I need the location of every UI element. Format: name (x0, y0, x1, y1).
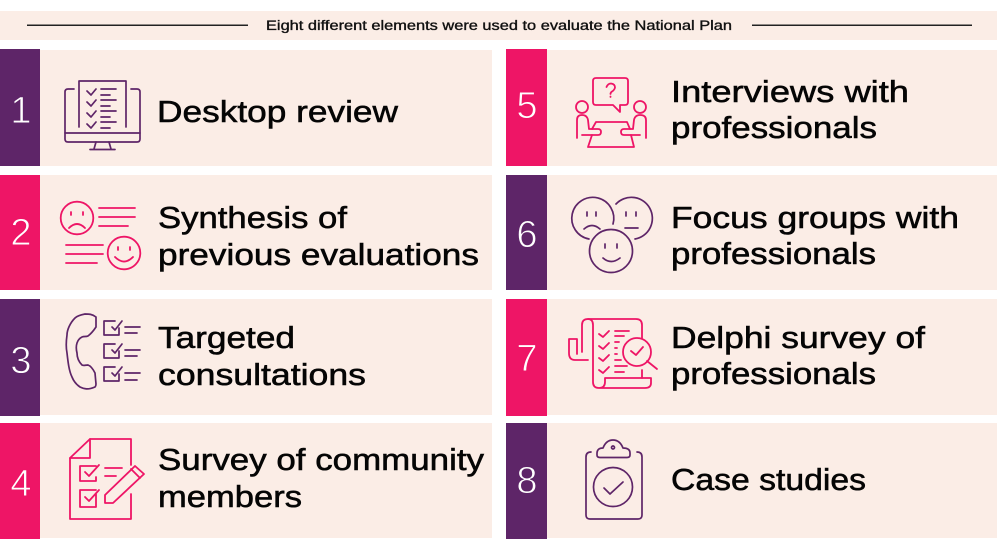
icon: computer monitor with checklist (65, 81, 140, 150)
label: Focus groups with (671, 200, 959, 235)
number 7: 7 (516, 338, 538, 380)
panel 7: delphi survey (506, 299, 997, 416)
icon: two people at table with question bubble (576, 78, 646, 147)
icon: document with pencil (70, 439, 144, 519)
number 5: 5 (516, 85, 538, 127)
panel 2: synthesis (0, 175, 492, 290)
header banner (0, 11, 997, 40)
number 1: 1 (10, 90, 32, 132)
icon: scroll with checklist and magnifier (569, 319, 657, 388)
number 4: 4 (10, 463, 32, 505)
panel 5: interviews (506, 49, 997, 166)
panel 7: delphi survey: professionals (671, 356, 876, 391)
label: Desktop review (157, 94, 399, 129)
icon: sad and happy faces with lines (61, 202, 140, 269)
panel 1: desktop review (0, 49, 492, 166)
panel 4: survey of community members: members (158, 479, 302, 514)
label: Case studies (671, 462, 866, 497)
heading: Eight different elements were used to evaluate the National Plan (266, 18, 732, 33)
panel 3: targeted consultations: consultations (158, 357, 366, 392)
panel 6: focus groups (506, 175, 997, 290)
icon: three faces (572, 197, 652, 272)
icon: clipboard with check (586, 440, 642, 519)
label: Survey of community (158, 442, 485, 477)
panel 6: focus groups: professionals (671, 236, 876, 271)
number 2: 2 (10, 212, 32, 254)
panel 2: synthesis: previous evaluations (158, 237, 479, 272)
label: Interviews with (671, 74, 909, 109)
number 6: 6 (516, 214, 538, 256)
number 3: 3 (10, 340, 32, 382)
panel 8: case studies (506, 423, 997, 539)
icon: telephone with checklist (66, 314, 140, 389)
panel 5: interviews: professionals (671, 110, 877, 145)
label: Delphi survey of (671, 320, 925, 355)
label: Targeted (158, 320, 295, 355)
label: Synthesis of (158, 200, 347, 235)
number 8: 8 (516, 460, 538, 502)
panel 3: targeted consultations (0, 299, 492, 416)
panel 4: survey of community members (0, 423, 492, 539)
